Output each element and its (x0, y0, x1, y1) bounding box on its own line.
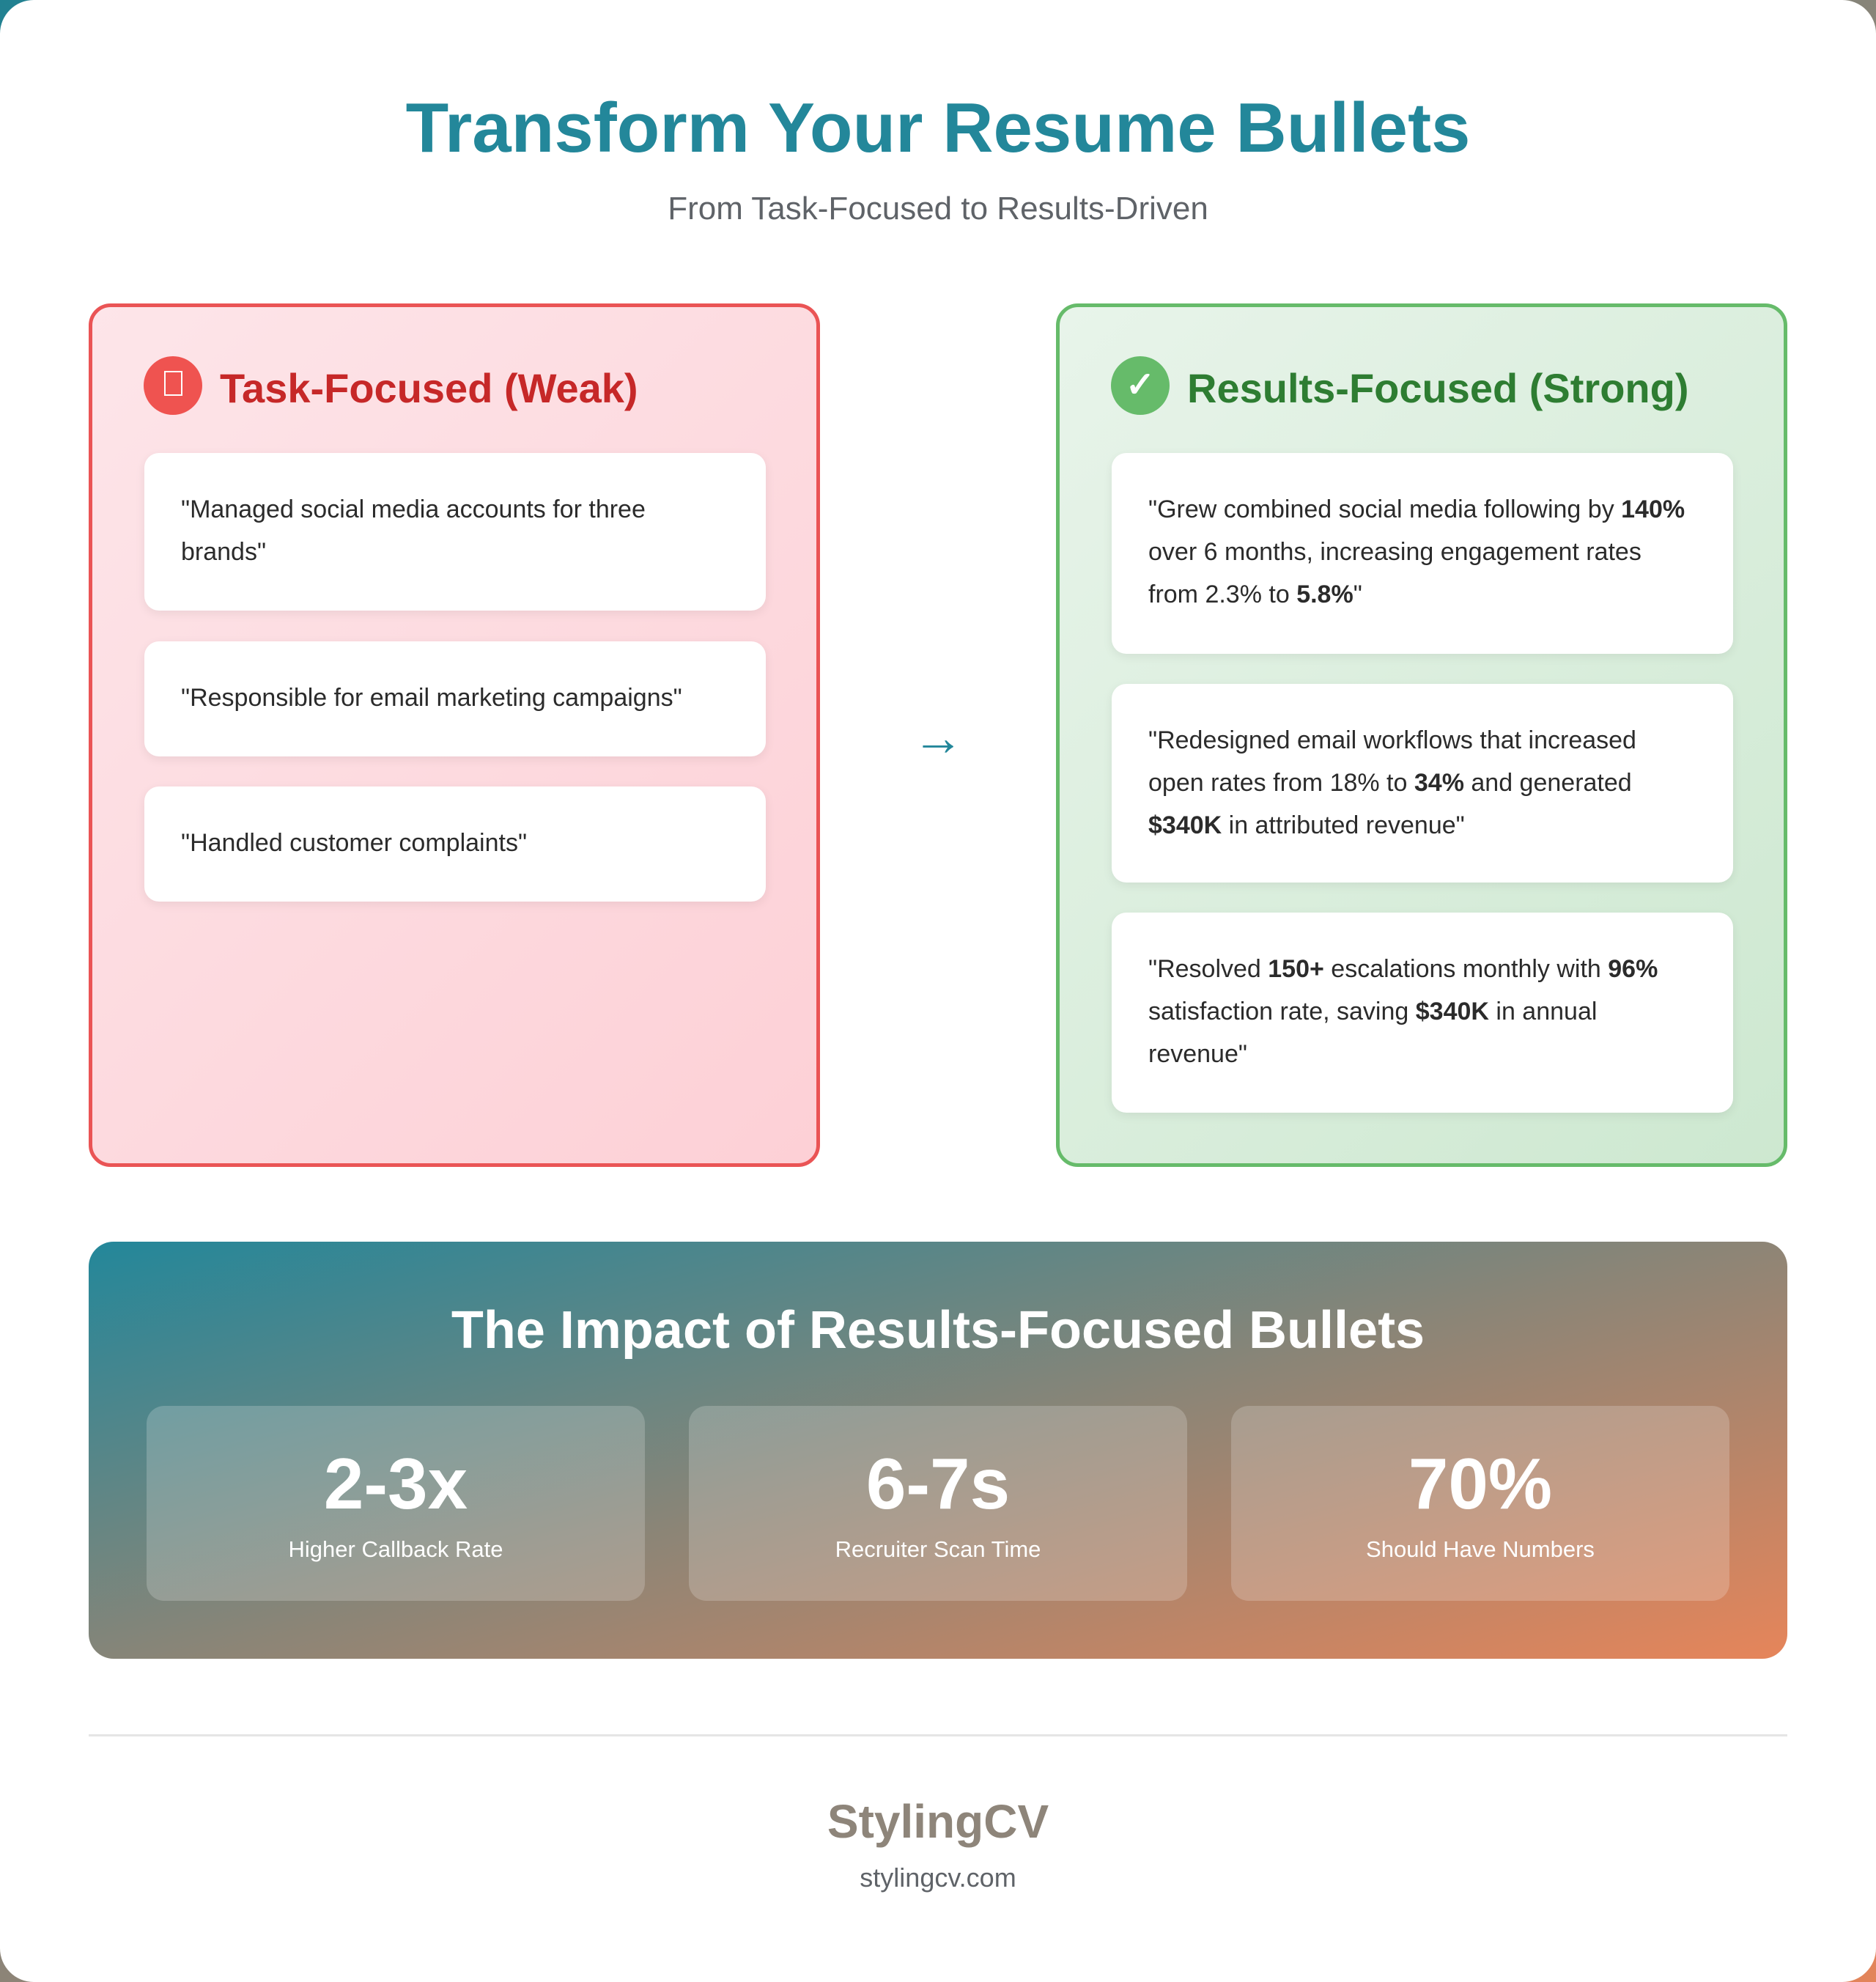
icon: weak (144, 356, 202, 415)
stat: callback: Higher Callback Rate (289, 1536, 503, 1562)
panel: strong (1056, 303, 1787, 1167)
card: strong 1: "Grew combined social media following by 140% over 6 months, increasing engagement rates from 2.3% to 5.8%" (1148, 496, 1685, 608)
stat: numbers: 70% (1408, 1443, 1552, 1524)
footer brand: StylingCV (827, 1795, 1049, 1848)
card: weak 1 (144, 453, 766, 611)
heading: strong: Results-Focused (Strong) (1187, 365, 1688, 411)
stat: numbers: Should Have Numbers (1366, 1536, 1595, 1562)
card: weak 2: "Responsible for email marketing campaigns" (181, 684, 682, 712)
arrow: → (912, 709, 964, 766)
footer url: stylingcv.com (860, 1863, 1016, 1893)
stat: callback (147, 1406, 645, 1601)
card: weak 3 (144, 786, 766, 902)
card: strong 3: "Resolved 150+ escalations monthly with 96% satisfaction rate, saving $340K in annual revenue" (1148, 955, 1658, 1068)
heading: weak: Task-Focused (Weak) (220, 365, 638, 411)
stat: scan time: Recruiter Scan Time (835, 1536, 1041, 1562)
card: weak 3: "Handled customer complaints" (181, 829, 527, 857)
stat: callback: 2-3x (324, 1443, 468, 1524)
card: strong 3 (1112, 913, 1733, 1113)
subtitle: From Task-Focused to Results-Driven (668, 191, 1208, 226)
card: weak 2 (144, 641, 766, 756)
stat: scan time (689, 1406, 1187, 1601)
title: Transform Your Resume Bullets (406, 89, 1470, 167)
panel: weak (89, 303, 820, 1167)
card: strong 1 (1112, 453, 1733, 654)
card: strong 2: "Redesigned email workflows that increased open rates from 18% to 34% and generated $340K in attributed revenue" (1148, 726, 1636, 839)
icon: check: ✓ (1126, 366, 1155, 405)
stat: numbers (1231, 1406, 1729, 1601)
icon: check (1111, 356, 1170, 415)
card: weak 1: "Managed social media accounts for three brands" (181, 496, 646, 566)
card: strong 2 (1112, 684, 1733, 883)
impact heading: The Impact of Results-Focused Bullets (451, 1301, 1425, 1360)
panel: impact (89, 1242, 1787, 1659)
stat: scan time: 6-7s (866, 1443, 1010, 1524)
